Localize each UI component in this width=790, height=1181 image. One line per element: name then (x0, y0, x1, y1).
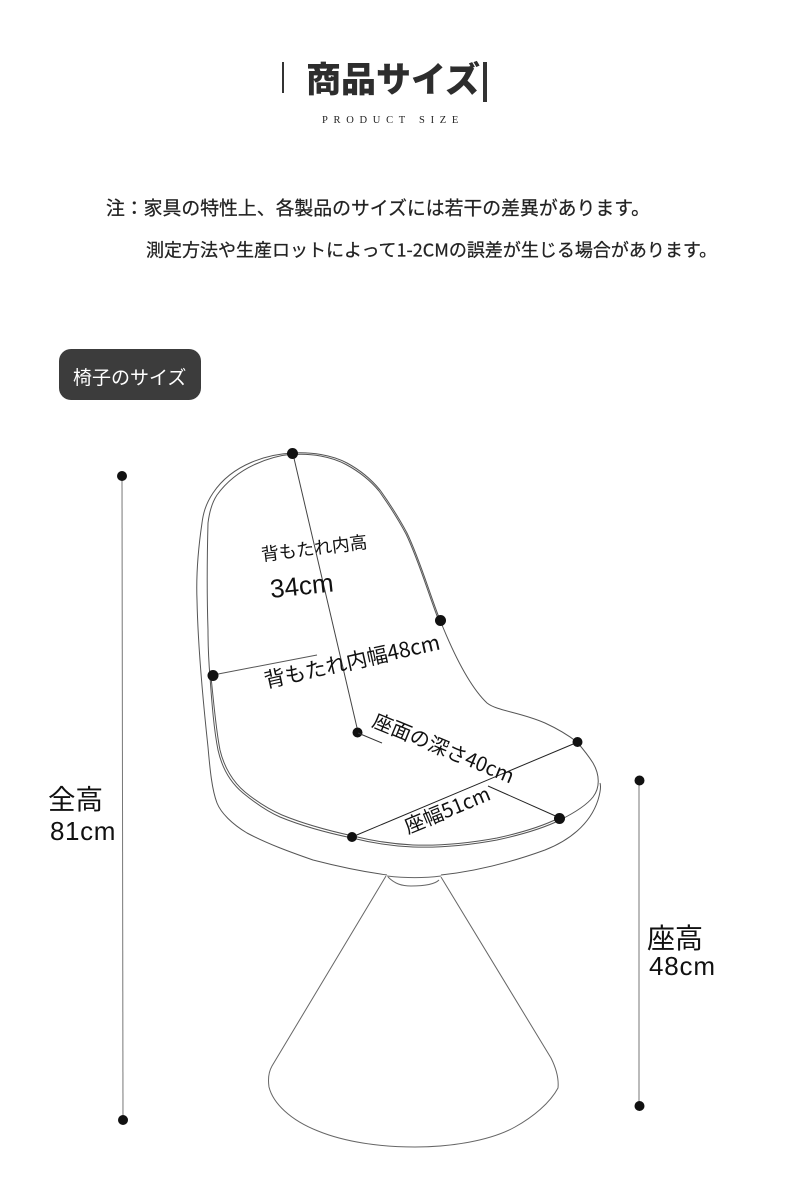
title marker bar (282, 62, 284, 93)
section label (59, 349, 201, 400)
dimension: backrest inner width: 背もたれ内幅48cm (261, 627, 443, 695)
dimension: backrest inner height: 34cm (268, 567, 335, 604)
dimension: backrest inner width (208, 615, 446, 695)
section label: 椅子のサイズ (73, 363, 186, 390)
subtitle: PRODUCT SIZE (322, 115, 464, 126)
chair seat and backrest outline (197, 453, 601, 875)
dimension: total height: 全高 (48, 777, 103, 817)
dimension: seat width and depth: 座幅51cm (399, 778, 494, 840)
dimension: seat height: 座高 (647, 917, 703, 957)
title end bar (483, 62, 487, 102)
note line 1: 注：家具の特性上、各製品のサイズには若干の差異があります。 (106, 194, 650, 220)
chair cone base (268, 876, 558, 1147)
dimension: seat width and depth: 座面の深さ40cm (369, 705, 519, 789)
dimension: seat height: 48cm (649, 951, 716, 981)
dimension: backrest inner height: 背もたれ内高 (260, 528, 369, 567)
title: 商品サイズ (306, 52, 480, 103)
dimension: total height (48, 471, 128, 1125)
dimension: backrest inner height (260, 448, 369, 738)
dimension: total height: 81cm (50, 816, 116, 846)
dimension: seat width and depth (347, 705, 582, 842)
dimension: seat height (634, 776, 716, 1111)
note line 2: 測定方法や生産ロットによって1-2CMの誤差が生じる場合があります。 (146, 236, 717, 262)
